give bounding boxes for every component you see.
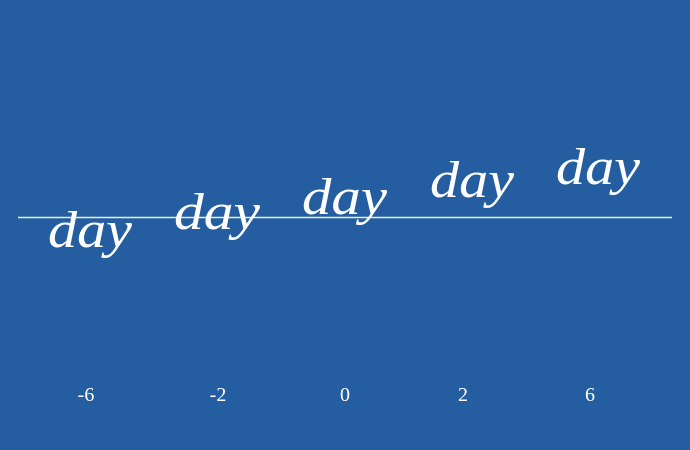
word: day at 0: day bbox=[302, 169, 388, 226]
axis labels: 2 bbox=[458, 384, 468, 406]
baseline line bbox=[18, 216, 672, 218]
axis labels: -2 bbox=[210, 384, 226, 406]
axis labels: 6 bbox=[585, 384, 595, 406]
word: day at -6: day bbox=[48, 202, 133, 259]
word: day at 2: day bbox=[430, 152, 515, 209]
word: day at -2: day bbox=[174, 184, 261, 241]
axis labels: -6 bbox=[78, 384, 94, 406]
axis labels bbox=[78, 384, 595, 406]
word: day at 6: day bbox=[556, 139, 641, 196]
axis labels: 0 bbox=[340, 384, 350, 406]
